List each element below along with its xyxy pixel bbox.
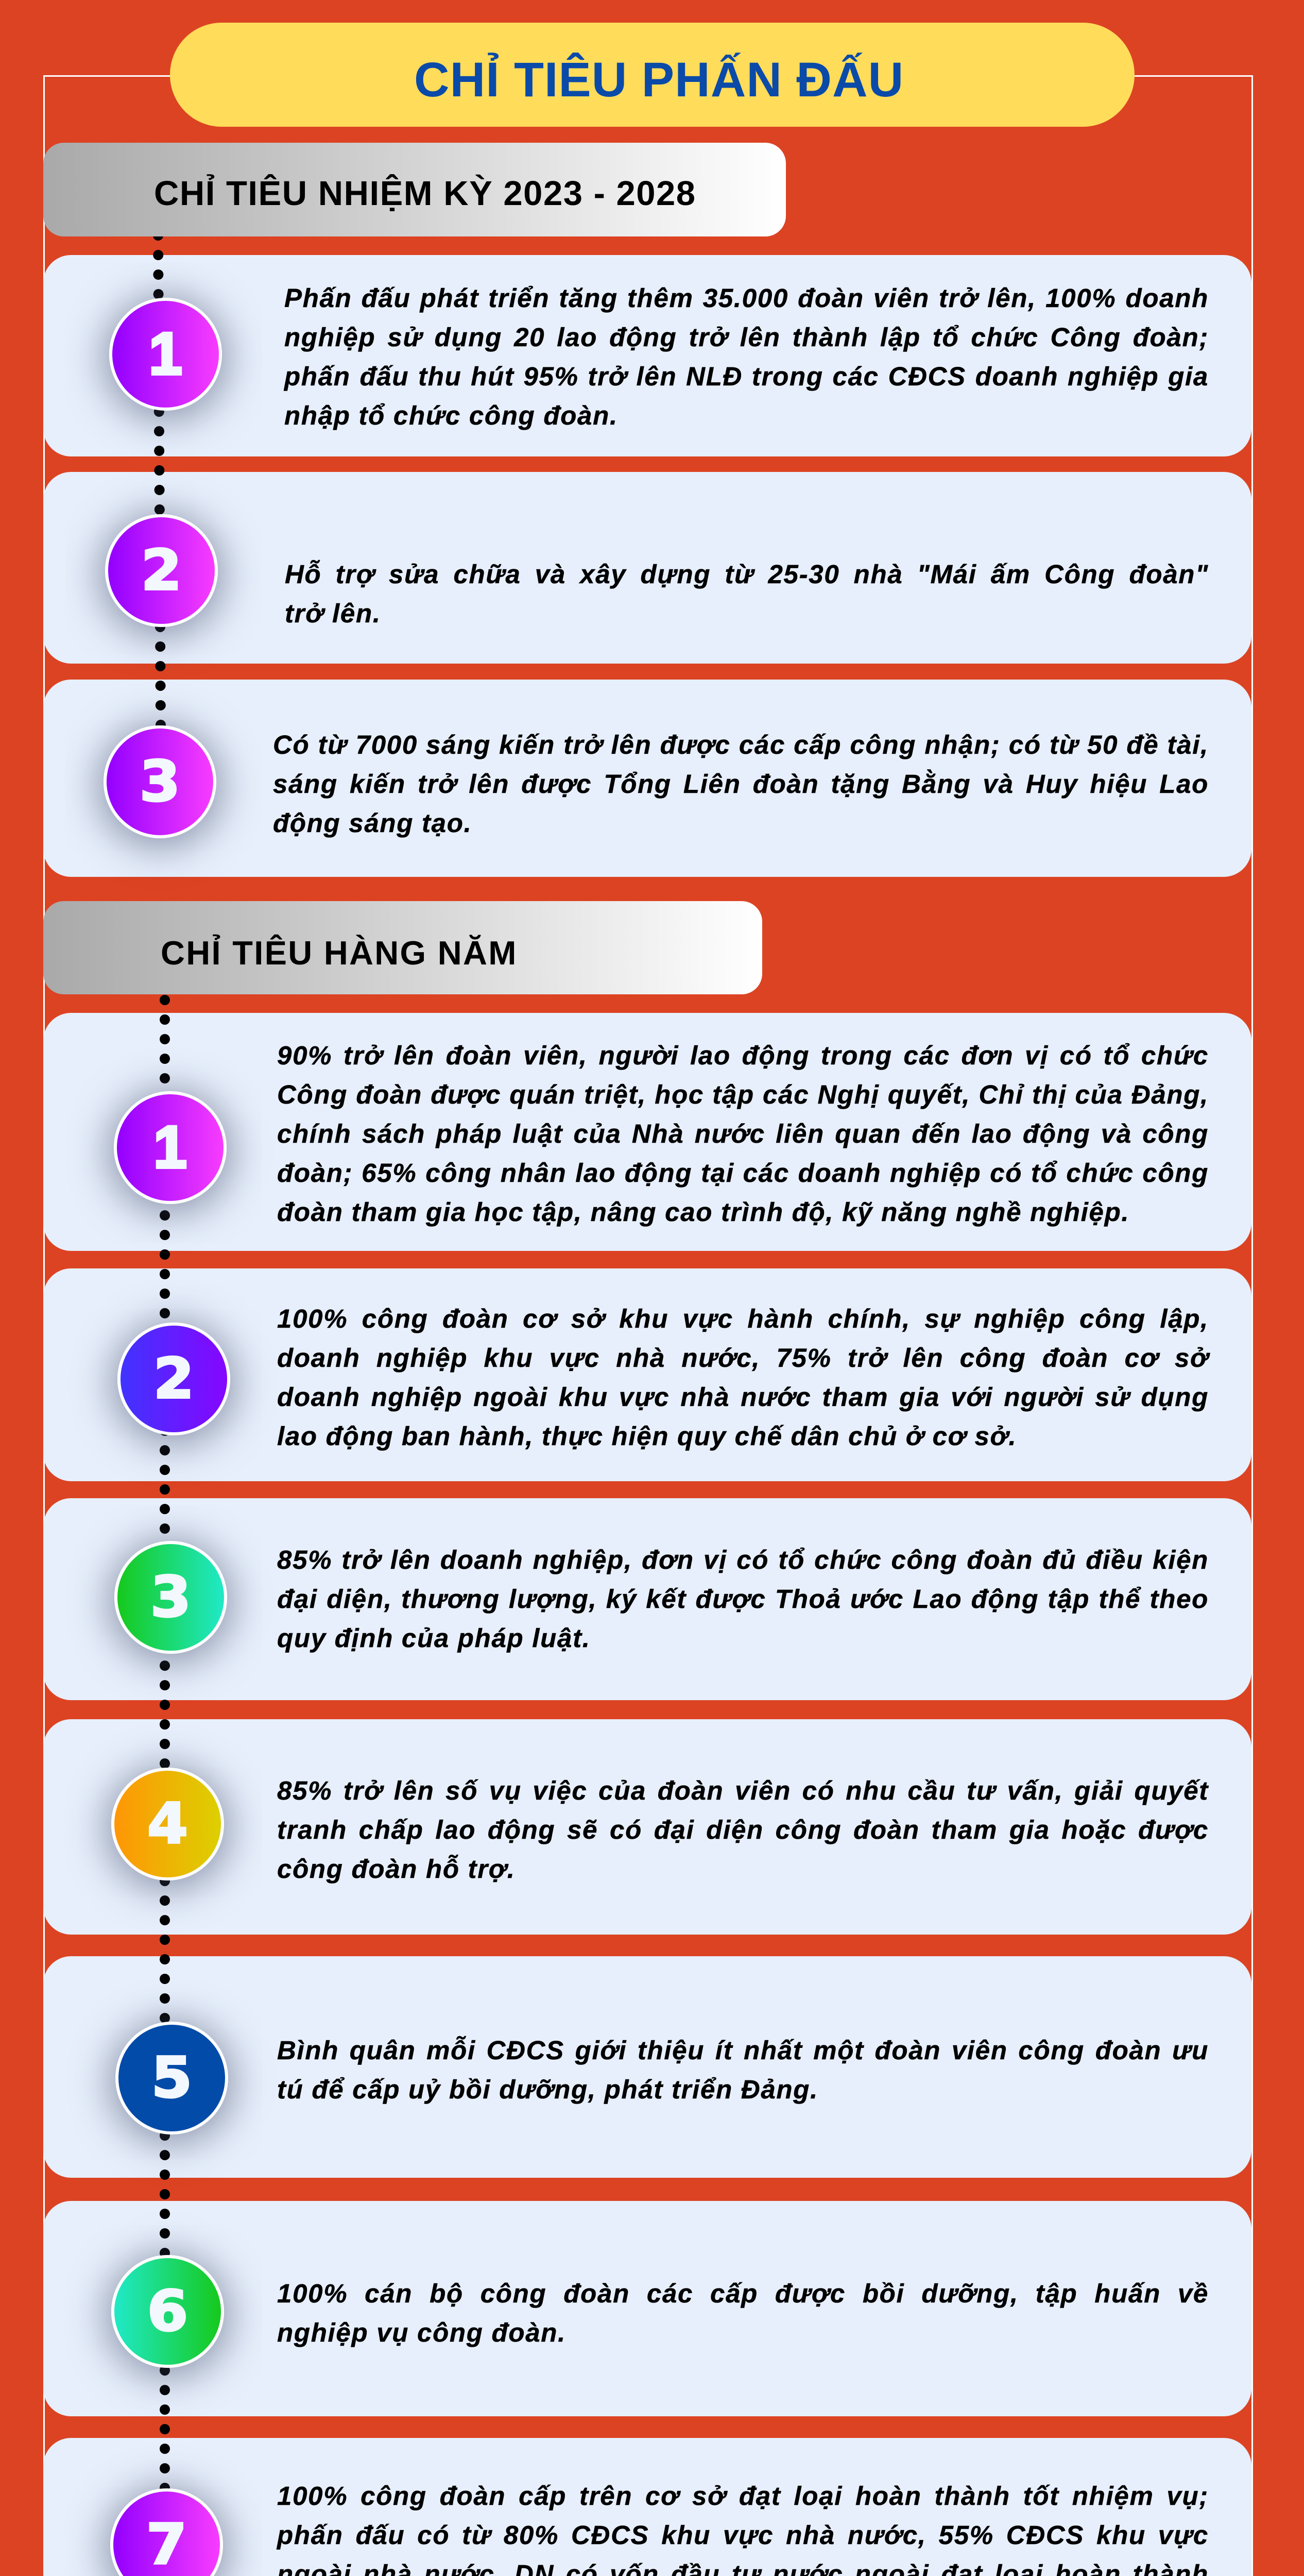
text: annual target 4: công đoàn hỗ trợ.: [277, 1854, 516, 1884]
panel: term target 3: [43, 680, 1251, 877]
text: annual target 6: nghiệp vụ công đoàn.: [277, 2318, 566, 2347]
text: term target 1: [283, 283, 1209, 430]
text: annual target 1: [277, 1041, 1209, 1227]
badge: annual 3: [114, 1541, 227, 1654]
text: term target 3: sáng kiến trở lên được Tổng Liên đoàn tặng Bằng và Huy hiệu Lao: [273, 769, 1209, 799]
text: annual target 5: Bình quân mỗi CĐCS giới thiệu ít nhất một đoàn viên công đoàn ưu: [277, 2036, 1209, 2065]
panel: annual target 4: [43, 1719, 1251, 1935]
badge: annual 4: 4: [147, 1792, 188, 1856]
badge: term 3: 3: [140, 750, 180, 814]
panel: annual target 6: [43, 2201, 1251, 2416]
text: annual target 5: [277, 2036, 1209, 2104]
badge: annual 5: [115, 2022, 228, 2134]
text: annual target 3: 85% trở lên doanh nghiệp, đơn vị có tổ chức công đoàn đủ điều kiện: [277, 1545, 1209, 1574]
badge: annual 1: 1: [154, 1114, 186, 1180]
badge: annual 6: [111, 2255, 224, 2368]
badge: annual 2: [117, 1323, 230, 1435]
badge: annual 5: 5: [151, 2046, 192, 2110]
text: annual target 7: [276, 2481, 1209, 2576]
heading text: term targets: CHỈ TIÊU NHIỆM KỲ 2023 - 2028: [154, 174, 696, 213]
badge: annual 6: 6: [147, 2279, 188, 2344]
panel: annual target 2: [43, 1268, 1251, 1481]
panel: term target 2: [43, 472, 1251, 664]
badge: annual 4: [111, 1768, 224, 1880]
badge: annual 1: [114, 1091, 227, 1204]
section heading: annual targets: [43, 901, 762, 994]
badge: annual 7: 7: [146, 2513, 187, 2576]
text: annual target 3: [277, 1545, 1209, 1653]
badge: term 3: [104, 725, 216, 838]
text: annual target 1: đoàn tham gia học tập, nâng cao trình độ, kỹ năng nghề nghiệp.: [277, 1197, 1129, 1227]
panel: term target 1: [43, 255, 1251, 456]
text: term target 1: nhập tổ chức công đoàn.: [284, 401, 618, 430]
section heading: term targets: [43, 143, 786, 236]
text: annual target 3: đại diện, thương lượng, ký kết được Thoả ước Lao động tập thể theo: [277, 1584, 1209, 1614]
text: annual target 2: lao động ban hành, thực hiện quy chế dân chủ ở cơ sở.: [277, 1421, 1017, 1451]
badge: term 1: [109, 298, 222, 411]
text: term target 2: trở lên.: [285, 599, 381, 628]
text: annual target 6: [277, 2279, 1209, 2347]
panel: annual target 3: [43, 1498, 1251, 1700]
text: term target 3: động sáng tạo.: [273, 808, 472, 838]
text: annual target 1: chính sách pháp luật của Nhà nước liên quan đến lao động và công: [277, 1119, 1209, 1148]
text: annual target 5: tú để cấp uỷ bồi dưỡng, phát triển Đảng.: [277, 2075, 818, 2104]
text: annual target 7: phấn đấu có từ 80% CĐCS khu vực nhà nước, 55% CĐCS khu vực: [277, 2520, 1209, 2550]
panel: annual target 7: [43, 2438, 1251, 2576]
text: annual target 2: doanh nghiệp khu vực nhà nước, 75% trở lên công đoàn cơ sở: [277, 1343, 1209, 1372]
text: annual target 1: 90% trở lên đoàn viên, người lao động trong các đơn vị có tổ chức: [277, 1041, 1209, 1070]
badge: term 1: 1: [149, 321, 182, 387]
text: term target 2: Hỗ trợ sửa chữa và xây dựng từ 25-30 nhà "Mái ấm Công đoàn": [285, 560, 1209, 589]
badge: annual 3: 3: [150, 1565, 191, 1630]
text: annual target 1: Công đoàn được quán triệt, học tập các Nghị quyết, Chỉ thị của Đảng,: [277, 1080, 1209, 1109]
heading text: annual targets: CHỈ TIÊU HÀNG NĂM: [161, 934, 518, 972]
text: annual target 4: tranh chấp lao động sẽ có đại diện công đoàn tham gia hoặc được: [277, 1815, 1209, 1844]
title text: CHỈ TIÊU PHẤN ĐẤU: [414, 53, 904, 107]
text: term target 3: Có từ 7000 sáng kiến trở lên được các cấp công nhận; có từ 50 đề tài,: [273, 730, 1209, 759]
text: term target 2: [285, 560, 1209, 628]
badge: annual 7: [110, 2488, 223, 2576]
text: annual target 6: 100% cán bộ công đoàn các cấp được bồi dưỡng, tập huấn về: [277, 2279, 1209, 2308]
badge: term 2: [105, 514, 218, 627]
badge: annual 2: 2: [153, 1347, 194, 1411]
text: annual target 2: 100% công đoàn cơ sở khu vực hành chính, sự nghiệp công lập,: [277, 1304, 1209, 1333]
panel: annual target 5: [43, 1956, 1251, 2178]
title pill: [170, 23, 1135, 127]
text: annual target 4: 85% trở lên số vụ việc của đoàn viên có nhu cầu tư vấn, giải quyết: [277, 1776, 1209, 1805]
text: annual target 2: doanh nghiệp ngoài khu vực nhà nước tham gia với người sử dụng: [277, 1382, 1209, 1412]
text: annual target 1: đoàn; 65% công nhân lao động tại các doanh nghiệp có tổ chức công: [277, 1158, 1209, 1188]
text: annual target 7: 100% công đoàn cấp trên cơ sở đạt loại hoàn thành tốt nhiệm vụ;: [277, 2481, 1209, 2511]
text: annual target 4: [277, 1776, 1209, 1884]
text: term target 1: phấn đấu thu hút 95% trở lên NLĐ trong các CĐCS doanh nghiệp gia: [284, 362, 1209, 391]
panel: annual target 1: [43, 1013, 1251, 1251]
text: term target 1: Phấn đấu phát triển tăng thêm 35.000 đoàn viên trở lên, 100% doanh: [284, 283, 1209, 313]
text: annual target 3: quy định của pháp luật.: [277, 1623, 591, 1653]
badge: term 2: 2: [141, 538, 182, 603]
text: term target 3: [273, 730, 1209, 838]
text: annual target 2: [277, 1304, 1210, 1451]
text: term target 1: nghiệp sử dụng 20 lao động trở lên thành lập tổ chức Công đoàn;: [284, 323, 1209, 352]
